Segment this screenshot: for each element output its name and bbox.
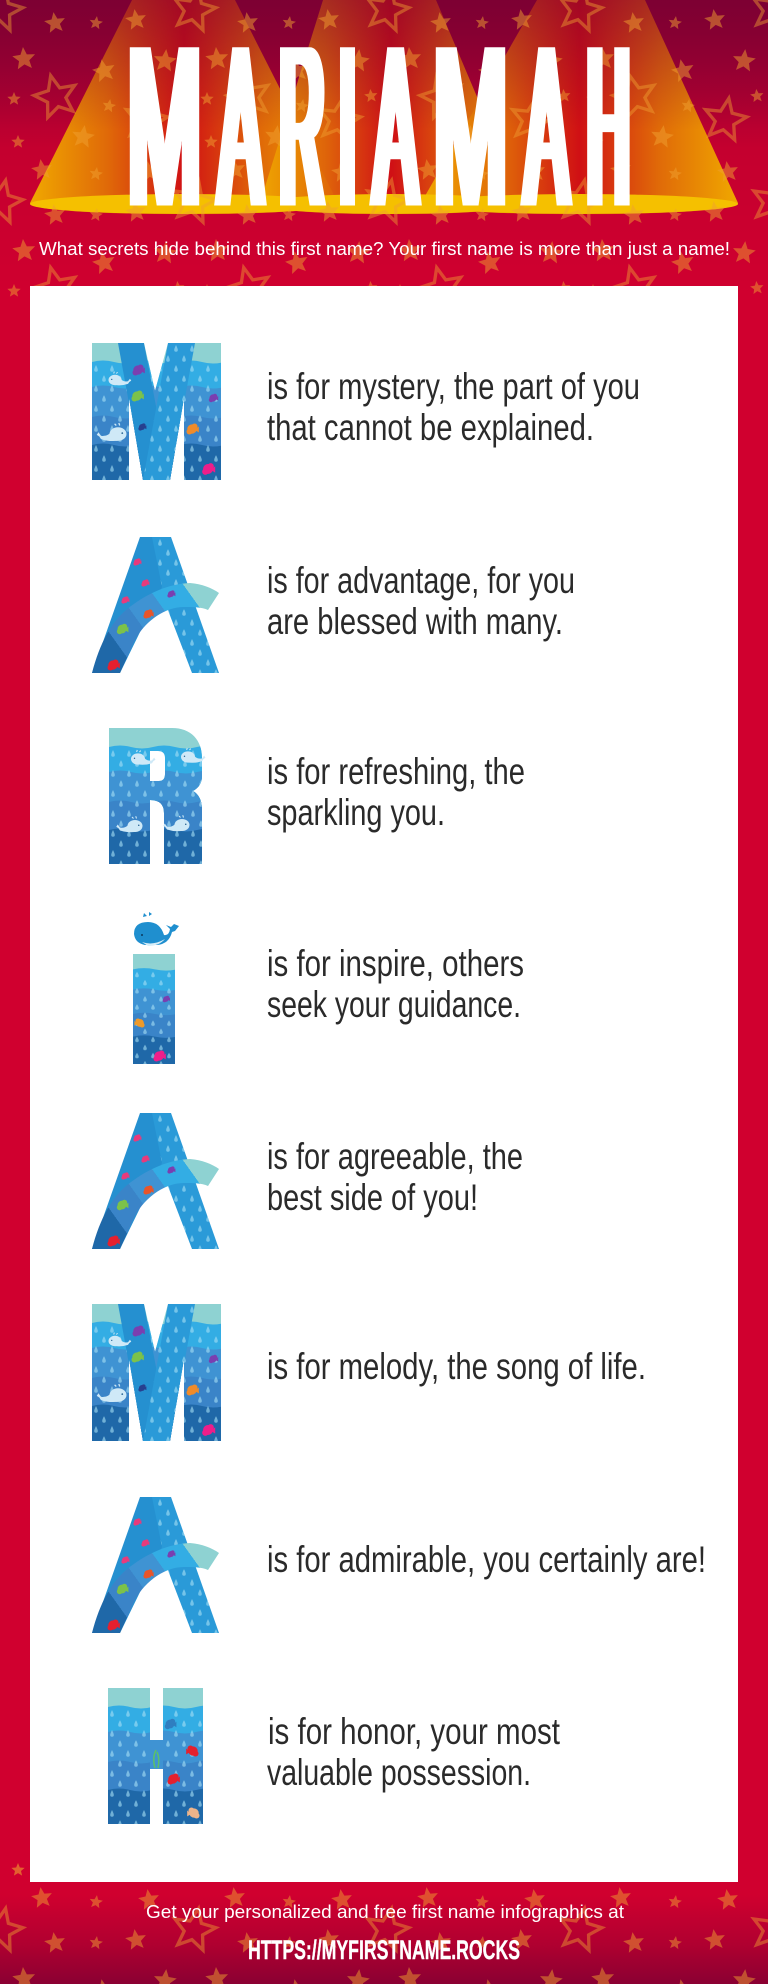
text: melody: is for melody, the song of life. — [267, 1346, 646, 1387]
row: letter R refreshing — [109, 728, 525, 865]
title: A — [525, 0, 568, 254]
text: refreshing: is for refreshing, the — [267, 751, 525, 792]
icon: letter M — [92, 1304, 224, 1441]
row: letter I inspire — [133, 912, 524, 1065]
text: mystery: is for mystery, the part of you — [267, 366, 640, 407]
row: letter H honor — [108, 1688, 561, 1825]
row: letter A advantage — [92, 537, 575, 673]
text: inspire: seek your guidance. — [267, 984, 521, 1025]
icon: letter i with whale — [133, 912, 179, 1064]
footer invitation: Get your personalized and free first name infographics at — [146, 1902, 624, 1922]
infographic page: H — [587, 0, 629, 254]
row: letter M mystery — [92, 343, 640, 480]
icon: letter A — [92, 537, 219, 673]
subtitle: What secrets hide behind this first name? Your first name is more than just a name! — [39, 239, 730, 259]
star pattern top — [0, 0, 768, 300]
text: advantage: is for advantage, for you — [267, 560, 575, 601]
title: M — [434, 0, 508, 254]
star pattern bottom — [0, 1884, 768, 1984]
icon: letter A — [92, 1113, 219, 1249]
text: honor: valuable possession. — [267, 1752, 531, 1793]
icon: letter M — [92, 343, 224, 480]
spotlights — [0, 0, 768, 214]
text: advantage: are blessed with many. — [267, 601, 563, 642]
text: inspire: is for inspire, others — [267, 943, 524, 984]
icon: letter H — [108, 1688, 203, 1824]
title: R — [280, 0, 324, 254]
footer url: HTTPS://MYFIRSTNAME.ROCKS — [248, 1935, 520, 1965]
row: letter A admirable — [92, 1497, 706, 1633]
side star — [11, 1863, 25, 1876]
title: I — [340, 0, 355, 254]
row: letter A agreeable — [92, 1113, 523, 1249]
text: mystery: that cannot be explained. — [267, 407, 594, 448]
row: letter M melody — [92, 1304, 646, 1441]
icon: letter R — [109, 728, 206, 864]
white content panel — [30, 286, 738, 1882]
text: refreshing: sparkling you. — [267, 792, 445, 833]
title: A — [219, 0, 262, 254]
text: agreeable: is for agreeable, the — [267, 1136, 523, 1177]
title: M — [128, 0, 202, 254]
title: A — [374, 0, 417, 254]
text: agreeable: best side of you! — [267, 1177, 478, 1218]
text: honor: is for honor, your most — [268, 1711, 561, 1752]
icon: letter A — [92, 1497, 219, 1633]
